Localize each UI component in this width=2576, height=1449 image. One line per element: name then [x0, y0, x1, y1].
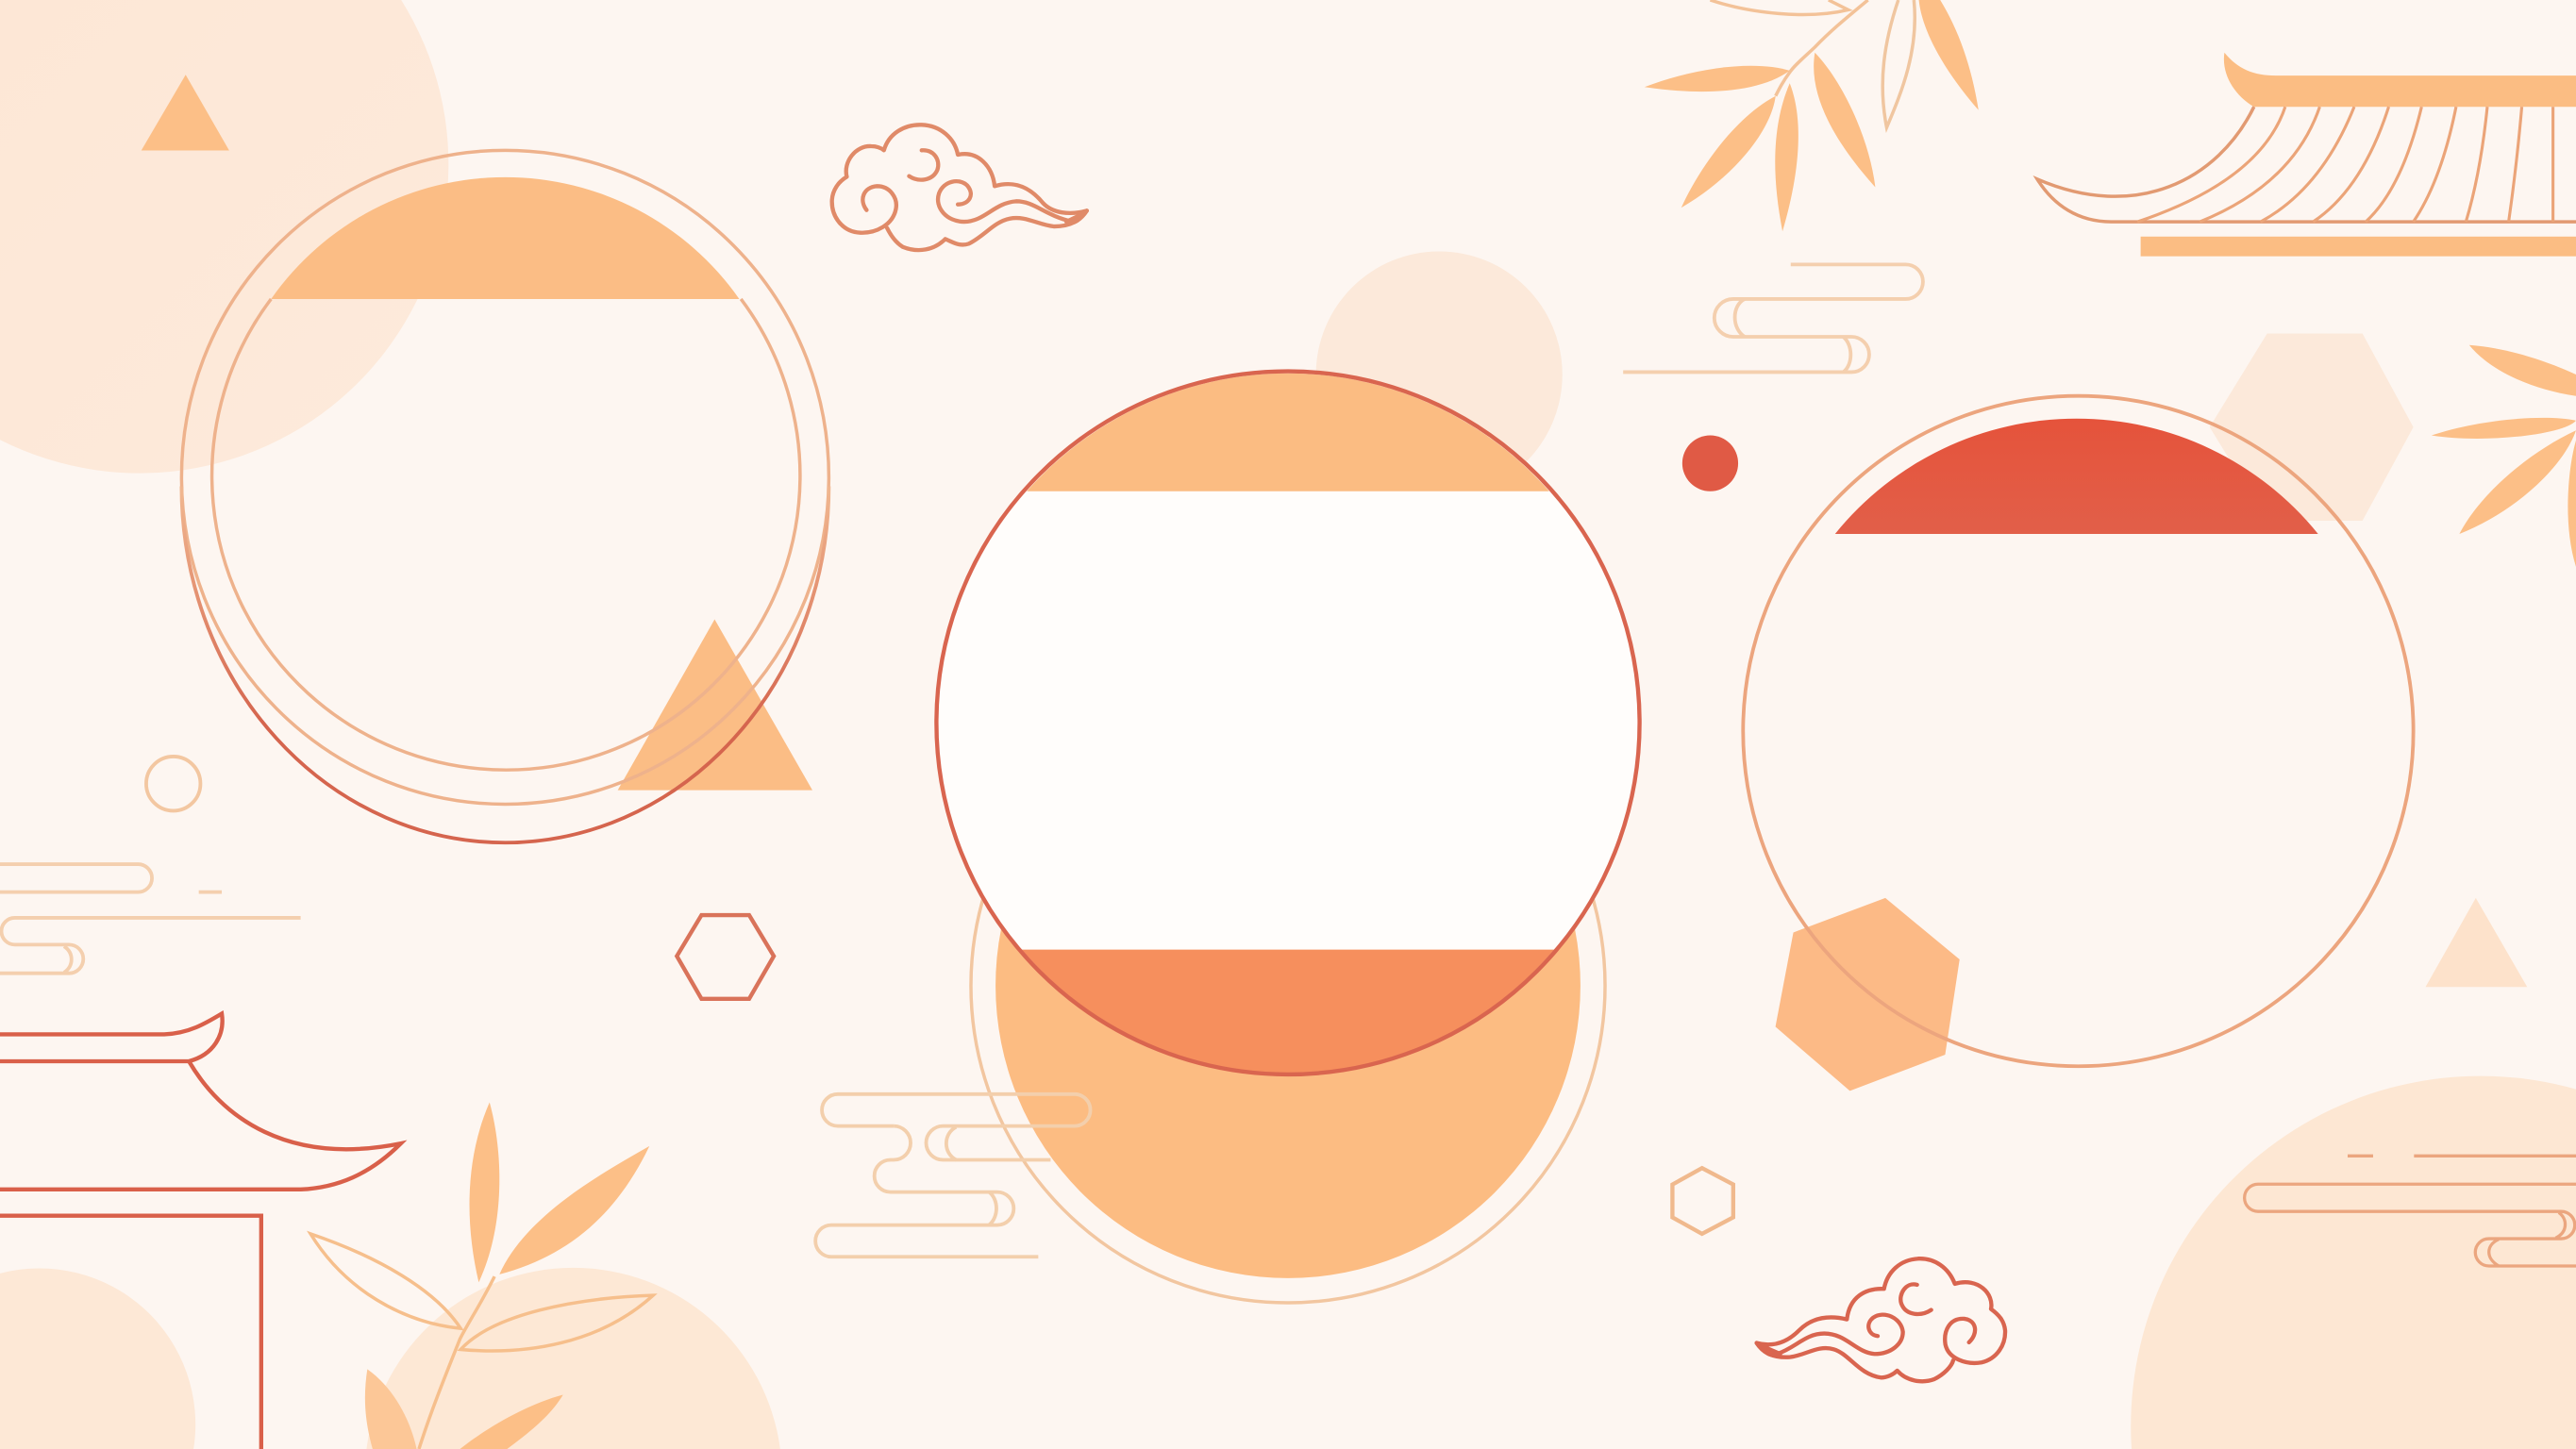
panel: right circle — [1743, 396, 2414, 1066]
background hexagon: top right — [2210, 334, 2414, 521]
centre outline — [936, 372, 1640, 1074]
icon: small ring left — [146, 757, 200, 810]
triangle overlapping left circle — [618, 620, 812, 791]
roof top band — [2224, 53, 2576, 107]
icon: pagoda roof bottom left — [0, 1014, 401, 1449]
panel: centre circle — [936, 372, 1640, 1303]
roof ribs — [2137, 107, 2553, 222]
left circle top cap — [271, 177, 739, 299]
icon: wave lines left — [0, 864, 301, 974]
centre back ring — [971, 669, 1605, 1303]
icon: wave lines bottom centre — [815, 1094, 1091, 1257]
orange hexagon under right ring — [1776, 898, 1960, 1091]
background circle: bottom middle — [366, 1268, 780, 1449]
icon: auspicious cloud bottom — [1757, 1258, 2005, 1381]
window frame — [0, 1216, 261, 1449]
background circle: bottom right — [2131, 1076, 2576, 1449]
icon: hexagon outline left — [677, 915, 774, 999]
icon: bamboo branch top right — [1645, 0, 1979, 231]
icon: wave lines bottom right — [2245, 1156, 2576, 1266]
icon: small triangle top left — [142, 75, 229, 151]
icon: bamboo leaves right edge — [2432, 345, 2576, 567]
background circle: behind centre — [1316, 251, 1563, 498]
left circle rings — [181, 150, 828, 842]
panel: left circle — [181, 150, 828, 842]
icon: red dot — [1682, 435, 1738, 491]
icon: auspicious cloud top — [832, 125, 1087, 250]
roof eave outline — [2037, 107, 2576, 222]
icon: wave lines top right — [1623, 264, 1923, 372]
icon: bamboo branch bottom — [310, 1103, 653, 1449]
background circle: top left — [0, 0, 448, 474]
centre white disc — [936, 372, 1640, 1074]
icon: hexagon outline bottom — [1672, 1168, 1733, 1234]
background circle: bottom left — [0, 1268, 195, 1449]
icon: pagoda roof top right — [2037, 53, 2576, 257]
centre top cap — [1027, 374, 1549, 491]
centre bottom cap — [1022, 950, 1554, 1074]
icon: pale triangle right — [2426, 898, 2527, 987]
roof base bar — [2141, 237, 2576, 257]
right circle red cap — [1835, 419, 2318, 534]
centre back disc — [995, 693, 1581, 1278]
right circle ring — [1743, 396, 2414, 1066]
